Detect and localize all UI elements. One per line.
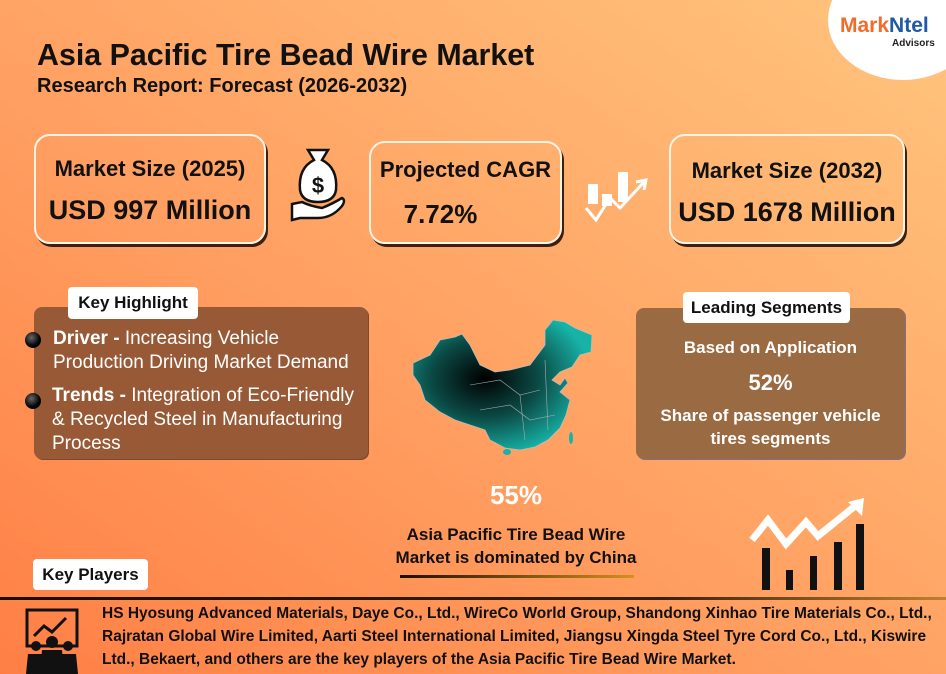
stat box: CAGR: Projected CAGR [380,157,551,182]
stat: 55% china: Market is dominated by China [396,548,636,567]
label: key players [33,559,148,590]
map: China [412,320,592,455]
panel: leading segments: tires segments [710,429,830,448]
stat box: market size 2025: Market Size (2025) [55,156,245,181]
stat: 55% china: 55% [490,480,542,510]
icon: money bag in hand: $ [312,173,324,198]
panel: key highlight [34,307,368,459]
icon: growth arrow [585,172,648,222]
logo [828,0,946,80]
icon: presentation people [26,608,78,674]
text: trends: & Recycled Steel in Manufacturing [52,409,342,430]
label: leading segments: Leading Segments [691,298,842,316]
logo: Advisors [892,38,935,49]
panel: leading segments: Based on Application [684,338,857,357]
text: driver: Driver - Increasing Vehicle [53,328,279,349]
text: trends: Process [52,433,121,454]
title: Asia Pacific Tire Bead Wire Market [37,37,534,72]
stat box: market size 2032: USD 1678 Million [678,197,896,227]
text: key players list: HS Hyosung Advanced Materials, Daye Co., Ltd., WireCo World Group, Shandong Xinhao Tire Materials Co., Ltd., [102,605,932,622]
stat: 55% china: Asia Pacific Tire Bead Wire [407,525,625,544]
label: key players: Key Players [42,564,139,584]
text: trends: Trends - Integration of Eco-Friendly [52,385,354,406]
stat box: CAGR: 7.72% [404,199,477,229]
stat box: CAGR [369,141,562,244]
icon: rising bar chart [749,498,864,590]
label: key highlight [68,287,198,319]
text: key players list [102,605,932,668]
panel: leading segments: 52% [748,370,793,395]
icon: money bag in hand [290,148,346,222]
label: key highlight: Key Highlight [78,293,188,312]
logo: MarkNtel [840,14,929,37]
panel: leading segments [636,308,905,459]
stat box: market size 2032 [669,134,905,244]
panel: leading segments: Share of passenger vehicle [660,406,881,425]
subtitle: Research Report: Forecast (2026-2032) [37,75,407,97]
text: key players list: Ltd., Bekaert, and others are the key players of the Asia Pacific Tire Bead Wire Market. [102,651,736,668]
text: key players list: Rajratan Global Wire Limited, Aarti Steel International Limited, Jiangsu Xingda Steel Tyre Cord Co., Ltd., Kiswire [102,628,926,645]
text: driver: Production Driving Market Demand [53,352,349,373]
stat box: market size 2025: USD 997 Million [49,195,251,225]
stat box: market size 2032: Market Size (2032) [692,158,882,183]
text: trends [52,385,354,454]
bullet: driver [25,332,41,348]
label: leading segments [683,292,850,323]
stat: 55% china [396,480,637,567]
text: driver [53,328,349,373]
stat box: market size 2025 [34,134,266,244]
bullet: trends [25,393,41,409]
